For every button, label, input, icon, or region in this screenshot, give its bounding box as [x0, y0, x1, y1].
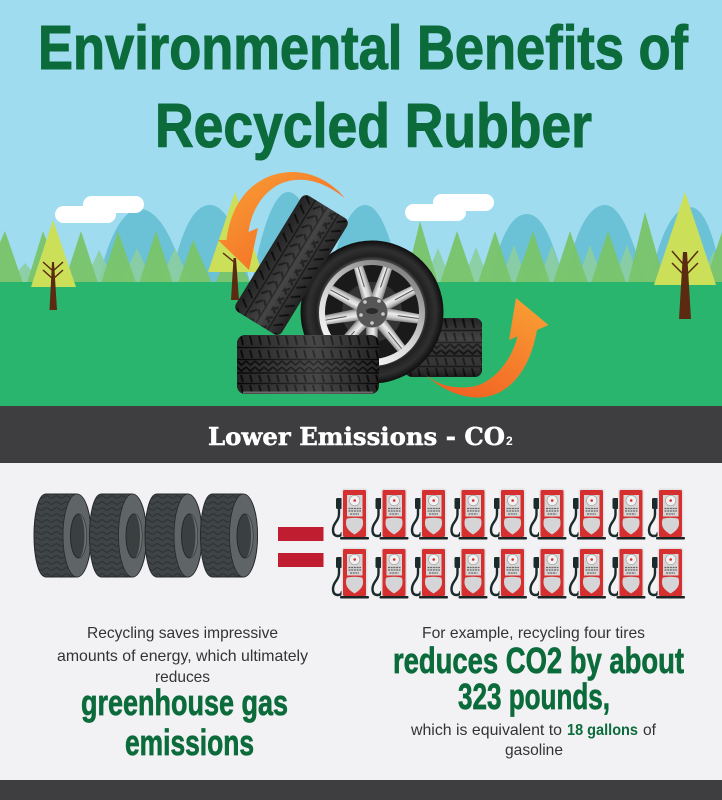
text block: right: 323 pounds, — [458, 676, 610, 717]
tree: middle — [208, 192, 262, 300]
text block: right: gasoline — [505, 742, 563, 759]
text block: left: Recycling saves impressive — [87, 625, 278, 642]
arrow: top left curved — [218, 172, 345, 270]
text block: right: of — [643, 722, 657, 739]
flat front tyre — [237, 335, 379, 394]
tilted tyre — [233, 193, 350, 337]
sky background — [0, 0, 722, 284]
section band: heading — [0, 406, 722, 463]
gas pumps row 1 — [333, 488, 685, 540]
ground — [0, 282, 722, 407]
text block: left: greenhouse gas — [81, 682, 288, 723]
text block: left — [57, 625, 308, 763]
section band: heading: 2 — [506, 434, 513, 448]
mountains — [98, 192, 722, 283]
rear flat tyre — [405, 318, 482, 377]
title: Recycled Rubber — [155, 92, 592, 161]
equals sign — [278, 527, 324, 567]
tree: right — [654, 192, 716, 319]
arrow: bottom right curved — [423, 298, 548, 398]
text block: right: 18 gallons — [567, 722, 638, 739]
text block: right: For example, recycling four tires — [422, 625, 645, 642]
footer band — [0, 780, 722, 800]
text block: left: amounts of energy, which ultimately — [57, 648, 308, 665]
background forest — [0, 212, 722, 283]
tyre pile illustration — [233, 193, 482, 394]
four tyres icons — [34, 494, 258, 577]
text block: right: which is equivalent to — [410, 722, 562, 739]
tree: left — [31, 220, 76, 310]
section band: heading: Lower Emissions - CO — [208, 422, 505, 451]
text block: left: reduces — [155, 669, 210, 686]
text block: left: emissions — [125, 722, 254, 763]
wheel with alloy rim — [300, 240, 444, 384]
title — [38, 14, 688, 161]
content panel — [0, 463, 722, 780]
gas pumps row 2 — [333, 548, 685, 598]
clouds — [55, 194, 494, 223]
text block: right — [393, 625, 684, 759]
